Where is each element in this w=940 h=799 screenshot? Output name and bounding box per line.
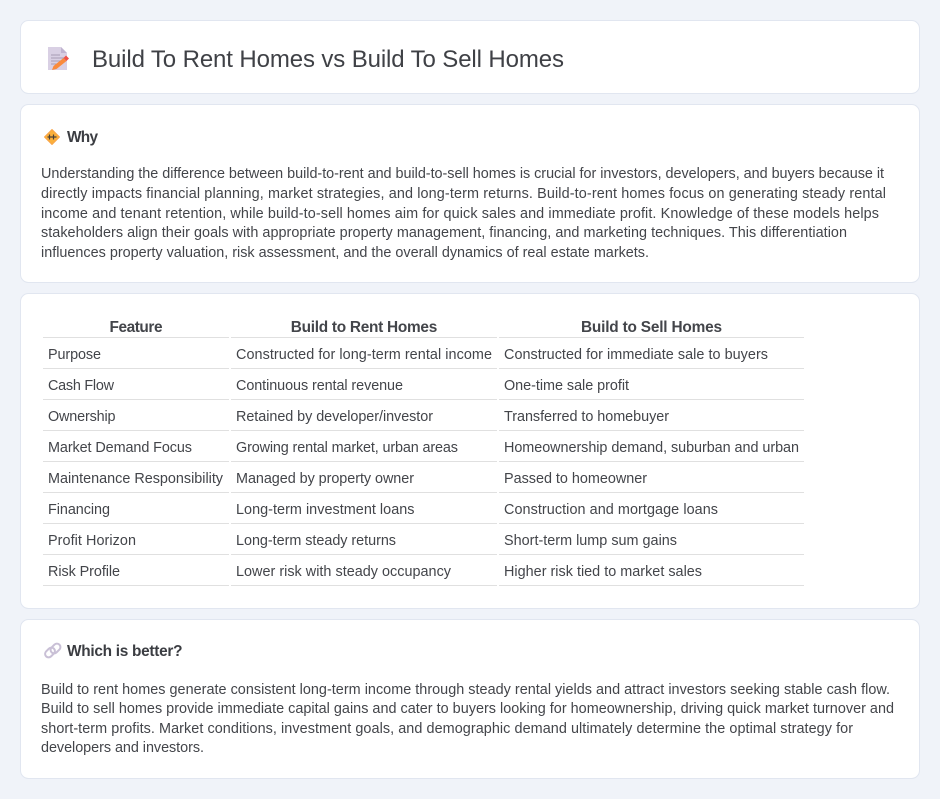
row: ownership: Retained by developer/investor — [236, 409, 433, 425]
row: financing: Financing — [48, 502, 110, 518]
which is better paragraph: Build to rent homes generate consistent long-term income through steady rental yields and attract investors seeking stable cash flow. — [41, 682, 890, 698]
row: ownership: Transferred to homebuyer — [504, 409, 669, 425]
row: maintenance responsibility: Passed to homeowner — [504, 471, 647, 487]
why paragraph: Understanding the difference between build-to-rent and build-to-sell homes is crucial for investors, developers, and buyers because it — [41, 166, 884, 182]
table header — [110, 319, 722, 336]
why paragraph: influences property valuation, risk assessment, and the overall dynamics of real estate markets. — [41, 245, 649, 261]
which is better paragraph: short-term profits. Market conditions, investment goals, and demographic demand ultimately determine the optimal strategy for — [41, 721, 853, 737]
row: ownership: Ownership — [48, 409, 116, 425]
row: maintenance responsibility: Maintenance Responsibility — [48, 471, 224, 487]
title text: Build To Rent Homes vs Build To Sell Homes — [92, 46, 564, 73]
why paragraph: directly impacts financial planning, market strategies, and long-term returns. Build-to-rent homes focus on generating steady rental — [41, 186, 886, 202]
why paragraph: income and tenant retention, while build-to-sell homes aim for quick sales and immediate profit. Knowledge of these models helps — [41, 206, 879, 222]
row: financing: Construction and mortgage loans — [504, 502, 718, 518]
row: profit horizon: Short-term lump sum gains — [504, 533, 677, 549]
which is better paragraph — [41, 682, 894, 756]
table header: Build to Rent Homes — [291, 319, 437, 336]
row: market demand focus: Growing rental market, urban areas — [236, 440, 458, 456]
heading: why: Why — [67, 129, 98, 146]
icon: memo with pencil — [48, 47, 69, 70]
row: maintenance responsibility: Managed by property owner — [236, 471, 414, 487]
row: risk profile — [48, 564, 702, 580]
table header: Build to Sell Homes — [581, 319, 722, 336]
row: risk profile: Risk Profile — [48, 564, 120, 580]
row: purpose — [48, 347, 768, 363]
which is better paragraph: Build to sell homes provide immediate capital gains and cater to buyers looking for homeownership, driving quick market turnover and — [41, 701, 894, 717]
heading: which is better: Which is better? — [67, 643, 182, 660]
row: market demand focus: Market Demand Focus — [48, 440, 192, 456]
table header: Feature — [110, 319, 163, 336]
row: risk profile: Higher risk tied to market sales — [504, 564, 702, 580]
row: purpose: Constructed for long-term rental income — [236, 347, 492, 363]
row: maintenance responsibility — [48, 471, 647, 487]
row: cash flow: Cash Flow — [48, 378, 115, 394]
row: purpose: Constructed for immediate sale to buyers — [504, 347, 768, 363]
icon: link — [44, 642, 62, 659]
panel: which is better — [20, 620, 920, 778]
row: market demand focus: Homeownership demand, suburban and urban — [504, 440, 799, 456]
row: cash flow: Continuous rental revenue — [236, 378, 403, 394]
row: profit horizon: Profit Horizon — [48, 533, 136, 549]
panel: why — [20, 104, 920, 282]
which is better paragraph: developers and investors. — [41, 740, 204, 756]
row: financing: Long-term investment loans — [236, 502, 414, 518]
panel: comparison table — [20, 294, 920, 608]
row: cash flow — [48, 378, 629, 394]
row: ownership — [48, 409, 669, 425]
why paragraph: stakeholders align their goals with appropriate property management, financing, and marketing techniques. This differentiation — [41, 225, 847, 241]
row: purpose: Purpose — [48, 347, 101, 363]
row: risk profile: Lower risk with steady occupancy — [236, 564, 452, 580]
row: financing — [48, 502, 718, 518]
row: market demand focus — [48, 440, 799, 456]
panel: title — [20, 20, 920, 94]
row: cash flow: One-time sale profit — [504, 378, 629, 394]
row: profit horizon: Long-term steady returns — [236, 533, 396, 549]
row: profit horizon — [48, 533, 677, 549]
why paragraph — [41, 166, 886, 261]
icon: diamond sign — [44, 130, 60, 144]
